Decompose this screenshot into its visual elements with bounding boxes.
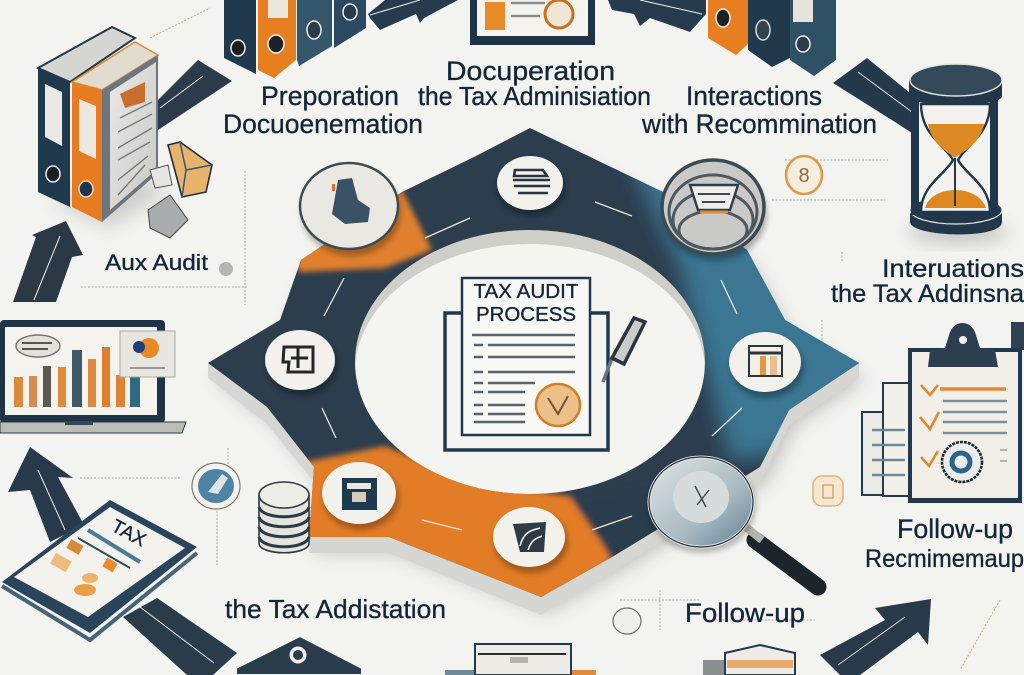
icon: tax tablet [2,500,197,640]
icon: node left [265,330,338,396]
icon: node top left glass [300,163,401,256]
icon: bank building [225,630,375,675]
label: Interuations the Tax Addinsna [831,255,1024,308]
arrow: lower right [820,599,931,675]
seal [536,384,580,426]
bar chart [14,347,140,407]
panel: top binders left [224,0,366,78]
arrow: up left [13,221,83,302]
label: Follow-up Recmimemaup: Follow-up [897,514,1013,544]
label: Interuations the Tax Addinsna: Interuations [882,255,1024,283]
icon: small globe badge [192,463,240,509]
connector ticks [322,202,742,530]
chart card [120,331,175,377]
icon: top centre card [470,0,595,45]
headings: top labels: the Tax Adminisiation [418,81,651,111]
panel: central document: PROCESS [476,304,576,326]
title: TAX AUDIT [474,281,578,303]
headings: top labels: Docuoenemation [223,109,423,139]
icon: bottom documents [445,644,795,675]
ring top face colours [208,128,859,597]
label: Interuations the Tax Addinsna: the Tax Addinsna [831,280,1024,308]
icon: front binders [38,27,170,228]
headings: top labels: Preporation [261,81,399,111]
headings: top labels: Interactions [686,81,822,111]
arrow: top right [608,0,706,32]
icon: small ring 8: 8 [798,165,810,187]
arrow: up left lower [8,447,84,542]
label: the Tax Addistation: the Tax Addistation [225,594,446,624]
arrow: top left [368,0,458,30]
headings: top labels [223,56,877,139]
label: Aux Audit: Aux Audit [105,250,208,275]
icon: tax tablet: TAX [108,516,150,551]
icon: small badge [219,262,233,276]
centre white space [355,244,705,500]
icon: small tag cluster [148,142,212,238]
icon: node magnifier [648,457,818,587]
icon: node top [497,156,565,216]
icon: clipboard with documents [862,322,1024,503]
icon: small ring 8 [786,156,822,194]
icon: hourglass [908,64,1008,244]
orange binder [72,42,158,222]
label: Follow-up Recmimemaup [865,514,1024,573]
label: Follow-up: Follow-up [685,598,805,628]
panel: top binders right [708,0,836,76]
icon: node bottom left [322,462,399,530]
icon: node top right stack [662,160,767,261]
panel: central document [445,278,608,450]
icon: pen [603,318,645,382]
document lines [472,335,575,422]
panel: process ring [208,128,865,618]
icon: small shell emblem [613,608,641,634]
icon: coin stack [259,482,309,553]
icon: node bottom [493,507,568,573]
headings: top labels: Docuperation [446,56,615,86]
arrow: lower left strip [123,598,237,675]
arrow: behind hourglass [833,58,915,135]
icon: node right [729,332,804,398]
icon: pale badge [813,476,843,506]
headings: top labels: with Recommination [641,109,877,139]
ring side face [208,363,859,615]
navy binder [38,27,135,207]
arrow: from binders toward documentation [158,60,232,130]
icon: laptop with bar chart [0,320,186,433]
